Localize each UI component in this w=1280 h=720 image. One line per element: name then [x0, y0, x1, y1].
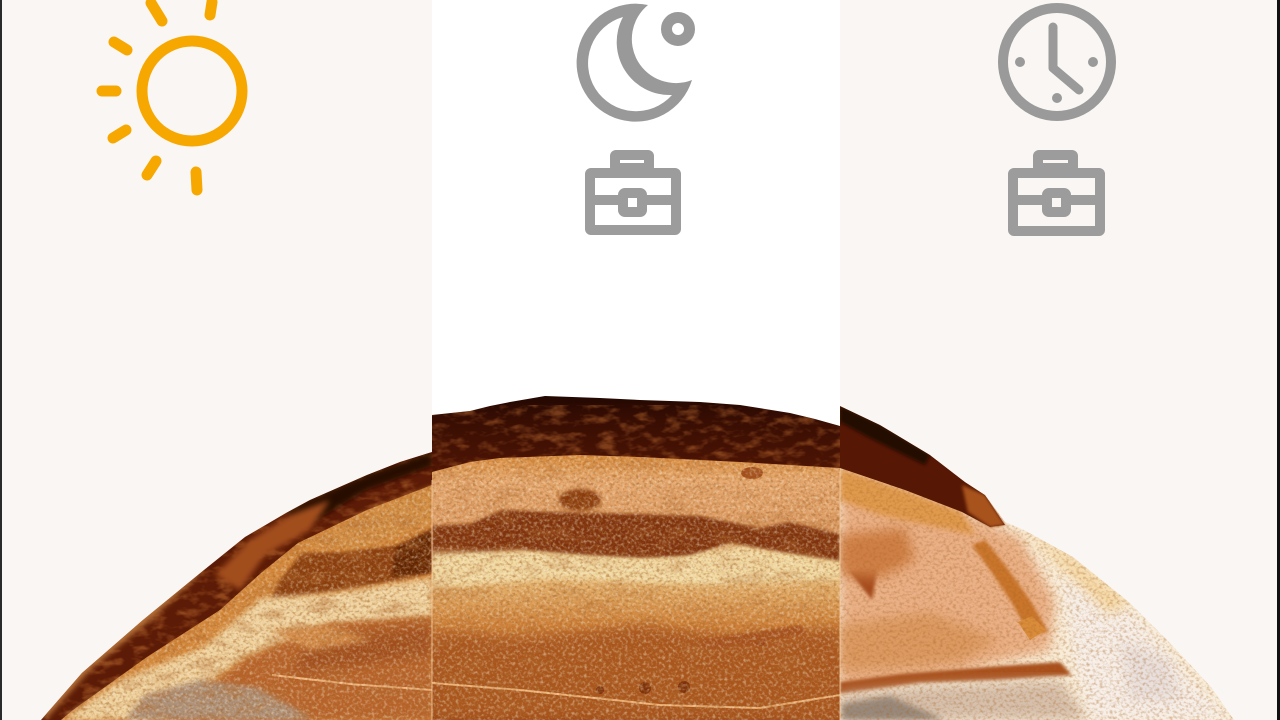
icon: sun: [102, 2, 242, 190]
panel: centre column: [432, 0, 840, 720]
bread: slice seams: [432, 470, 840, 720]
icon: briefcase centre: [590, 155, 676, 230]
frame edge: right: [1277, 0, 1280, 720]
icon: clock: [1003, 8, 1111, 116]
bread: right slice: [838, 400, 1238, 720]
icon: briefcase right: [1013, 155, 1100, 231]
bread: centre slice: [430, 390, 842, 720]
frame edge: left: [0, 0, 2, 720]
bread: left slice: [30, 440, 440, 720]
icon: crescent moon: [577, 4, 692, 122]
